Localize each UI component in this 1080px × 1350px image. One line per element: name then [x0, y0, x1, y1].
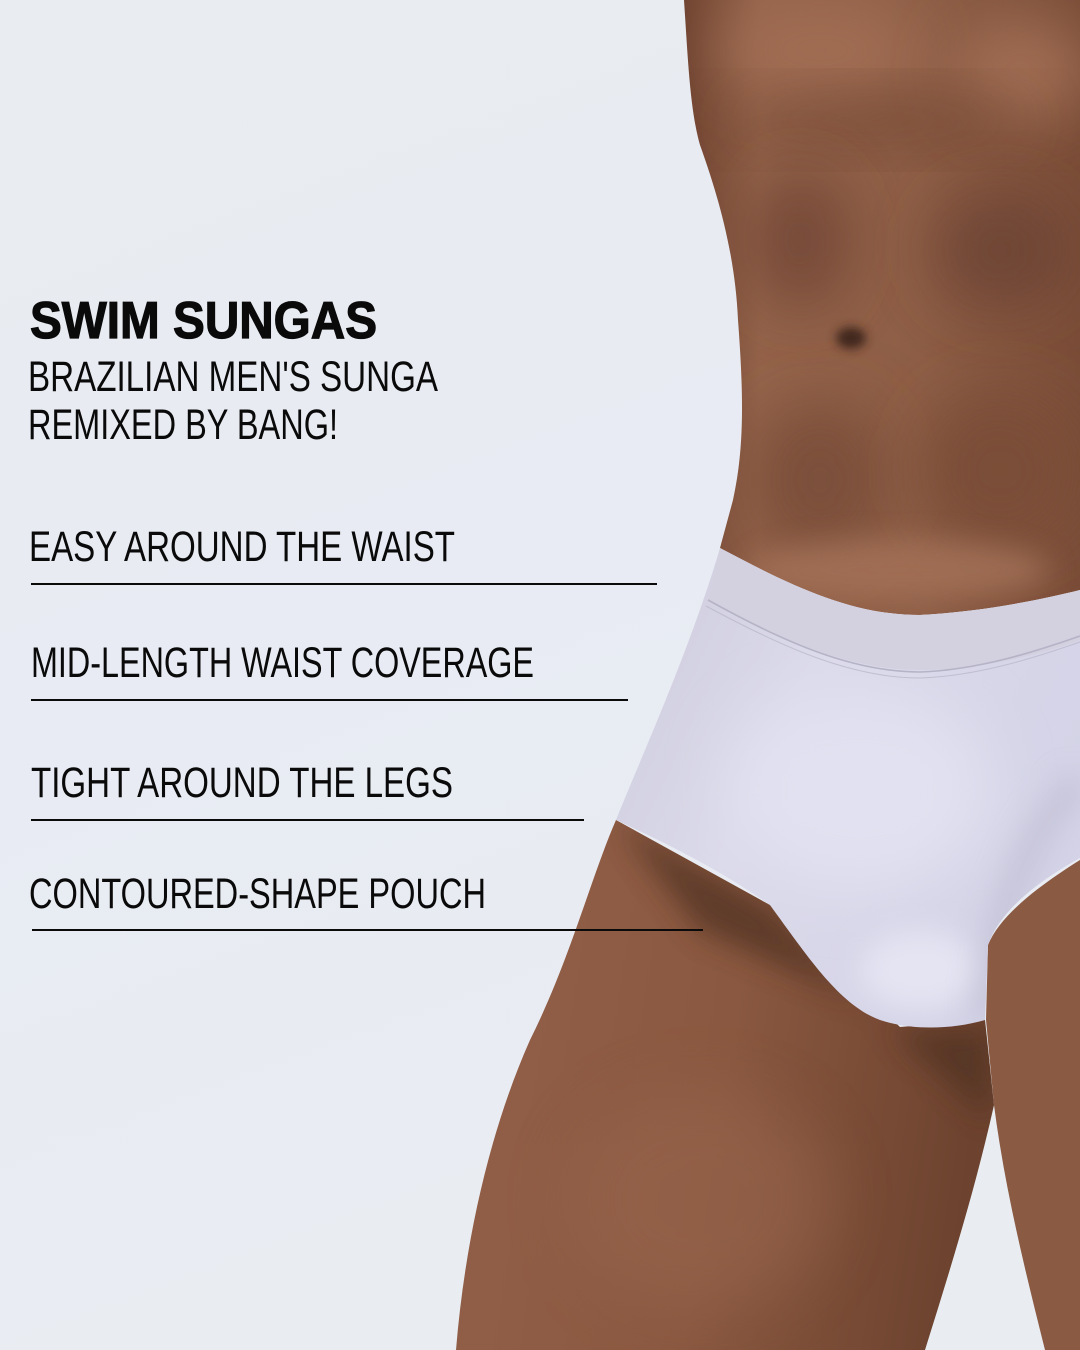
- feature: easy around the waist: EASY AROUND THE WAIST: [29, 523, 455, 571]
- feature: contoured-shape pouch: CONTOURED-SHAPE POUCH: [29, 870, 486, 918]
- waistband seam: [706, 600, 1080, 678]
- subtitle: BRAZILIAN MEN'S SUNGA: [28, 353, 438, 401]
- subtitle: [28, 353, 438, 449]
- title: SWIM SUNGAS: [30, 292, 377, 350]
- subtitle: REMIXED BY BANG!: [28, 401, 338, 449]
- back leg: [986, 860, 1080, 1350]
- torso: [680, 0, 1080, 620]
- photo: model in white swim sunga: [450, 0, 1080, 1350]
- feature: mid-length waist coverage: MID-LENGTH WAIST COVERAGE: [31, 639, 534, 687]
- feature: tight around the legs: TIGHT AROUND THE LEGS: [31, 759, 453, 807]
- garment: [610, 540, 1080, 1035]
- front leg: [450, 815, 1010, 1350]
